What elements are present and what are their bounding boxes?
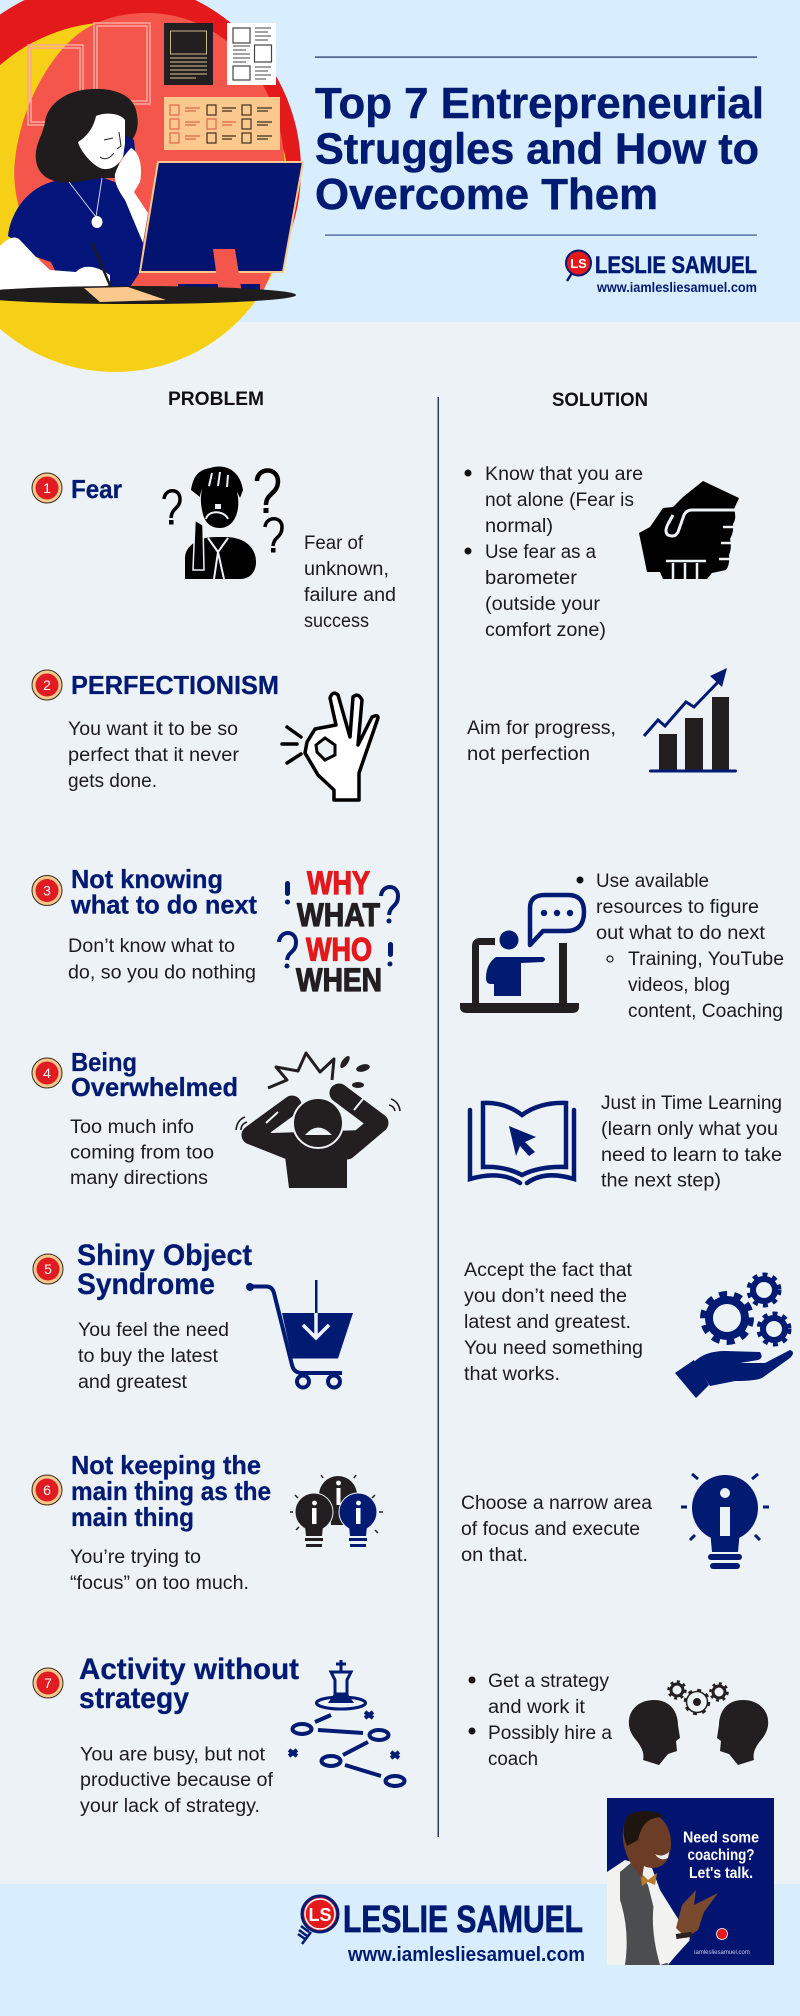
description: Fear of bbox=[304, 533, 364, 554]
problem 4: being overwhelmed bbox=[32, 1047, 400, 1189]
icon: open book with cursor bbox=[470, 1103, 574, 1183]
heading: fear: Fear bbox=[71, 474, 122, 504]
problem 5: shiny object syndrome bbox=[33, 1239, 353, 1393]
footer logo: www.iamlesliesamuel.com bbox=[347, 1944, 585, 1966]
description: You’re trying to bbox=[70, 1547, 201, 1568]
icon: logo magnifier bbox=[298, 1896, 338, 1944]
description: Choose a narrow area bbox=[461, 1493, 652, 1514]
bullet list bbox=[464, 464, 643, 641]
description: not perfection bbox=[467, 744, 590, 765]
icon: confused man bbox=[164, 466, 282, 579]
icon: online teacher bbox=[460, 895, 584, 1013]
photo: man in vest bbox=[607, 1811, 718, 1965]
description bbox=[68, 936, 256, 984]
heading: Shiny Object bbox=[77, 1239, 252, 1272]
icon: logo magnifier: LS bbox=[570, 256, 587, 271]
bullet list: comfort zone) bbox=[485, 620, 606, 641]
icon: gripping fist bbox=[639, 481, 739, 579]
number badge 6 bbox=[32, 1475, 62, 1505]
column heading: solution: SOLUTION bbox=[552, 390, 648, 411]
description bbox=[467, 718, 616, 765]
description: (learn only what you bbox=[601, 1119, 778, 1140]
description bbox=[601, 1093, 782, 1192]
heading: main thing bbox=[71, 1502, 194, 1532]
bullet list: coach bbox=[488, 1749, 538, 1770]
heading bbox=[70, 864, 257, 920]
description: “focus” on too much. bbox=[70, 1573, 249, 1594]
description: failure and bbox=[304, 585, 396, 606]
bullet list: Use fear as a bbox=[485, 542, 596, 563]
description: on that. bbox=[461, 1545, 528, 1566]
description: latest and greatest. bbox=[464, 1312, 631, 1333]
footer logo: LESLIE SAMUEL bbox=[343, 1899, 583, 1941]
number badge 7: 7 bbox=[44, 1675, 52, 1691]
problem 6: not keeping the main thing bbox=[32, 1450, 383, 1594]
description: perfect that it never bbox=[68, 745, 240, 766]
icon: chess strategy bbox=[289, 1660, 404, 1786]
icon: two heads with gears bbox=[629, 1682, 768, 1765]
icon: stressed person bbox=[236, 1053, 400, 1188]
footer band bbox=[0, 1884, 800, 2016]
heading: strategy bbox=[79, 1682, 189, 1715]
description: that works. bbox=[464, 1364, 560, 1385]
icon: why what who when: WHO bbox=[306, 932, 372, 968]
solution 4 bbox=[470, 1093, 782, 1192]
number badge 1 bbox=[32, 473, 62, 503]
heading: Syndrome bbox=[77, 1268, 215, 1301]
small logo bbox=[694, 1928, 750, 1956]
solution 5 bbox=[464, 1260, 793, 1398]
header logo bbox=[566, 250, 757, 295]
description bbox=[304, 533, 396, 632]
heading: Activity without bbox=[79, 1653, 299, 1686]
title: Top 7 Entrepreneurial bbox=[315, 79, 764, 128]
number badge 4: 4 bbox=[43, 1065, 51, 1081]
description bbox=[80, 1744, 274, 1817]
number badge 5: 5 bbox=[44, 1261, 52, 1277]
heading bbox=[77, 1239, 252, 1301]
callout text: Need some bbox=[683, 1830, 759, 1846]
heading bbox=[71, 1450, 271, 1532]
bullet list: Know that you are bbox=[485, 464, 643, 485]
description: You need something bbox=[464, 1338, 643, 1359]
bullet list: videos, blog bbox=[628, 975, 730, 996]
bullet list: content, Coaching bbox=[628, 1001, 783, 1022]
coaching callout card bbox=[607, 1798, 774, 1965]
header band bbox=[0, 0, 800, 322]
solution 1 bbox=[464, 464, 739, 641]
bullet list: out what to do next bbox=[596, 923, 766, 944]
bullet list: Training, YouTube bbox=[628, 949, 784, 970]
icon: why what who when: WHEN bbox=[296, 962, 382, 998]
description bbox=[70, 1117, 214, 1189]
heading: main thing as the bbox=[71, 1476, 271, 1506]
bullet list: and work it bbox=[488, 1697, 586, 1718]
callout text: Let's talk. bbox=[689, 1865, 753, 1882]
description bbox=[461, 1493, 652, 1566]
column heading: problem: PROBLEM bbox=[168, 389, 264, 410]
description: You feel the need bbox=[78, 1320, 229, 1341]
center divider bbox=[438, 397, 439, 1837]
description bbox=[68, 719, 240, 792]
icon: why what who when: WHY bbox=[307, 865, 370, 901]
title bbox=[315, 79, 764, 219]
problem 2: perfectionism bbox=[32, 670, 378, 800]
problem 7: activity without strategy bbox=[33, 1653, 404, 1817]
problem 1: fear bbox=[32, 466, 396, 632]
description: Too much info bbox=[70, 1117, 194, 1138]
icon: hand with gears bbox=[675, 1274, 793, 1398]
description: you don’t need the bbox=[464, 1286, 627, 1307]
icon: why what who when: WHAT bbox=[297, 897, 380, 933]
bullet list: normal) bbox=[485, 516, 553, 537]
description: success bbox=[304, 611, 369, 632]
icon: three light bulbs bbox=[290, 1475, 383, 1547]
description: need to learn to take bbox=[601, 1145, 782, 1166]
bullet list bbox=[468, 1671, 612, 1770]
solution 6 bbox=[461, 1474, 769, 1569]
title: Struggles and How to bbox=[315, 124, 759, 174]
heading: perfectionism: PERFECTIONISM bbox=[71, 670, 279, 700]
description: many directions bbox=[70, 1168, 208, 1189]
icon: logo magnifier: LS bbox=[308, 1905, 332, 1925]
icon: logo magnifier bbox=[566, 250, 591, 281]
icon: ok hand bbox=[282, 693, 378, 800]
title block bbox=[315, 56, 764, 236]
number badge 7 bbox=[33, 1668, 63, 1698]
description: the next step) bbox=[601, 1170, 721, 1192]
description: your lack of strategy. bbox=[80, 1796, 260, 1817]
number badge 2 bbox=[32, 670, 62, 700]
footer logo bbox=[298, 1896, 585, 1966]
heading: Overwhelmed bbox=[71, 1072, 238, 1102]
description: to buy the latest bbox=[78, 1346, 219, 1367]
description: gets done. bbox=[68, 771, 157, 792]
description bbox=[70, 1547, 249, 1594]
header logo: LESLIE SAMUEL bbox=[595, 252, 757, 279]
number badge 1: 1 bbox=[43, 480, 51, 496]
icon: why what who when bbox=[279, 865, 398, 998]
description: productive because of bbox=[80, 1770, 274, 1791]
bullet list: barometer bbox=[485, 568, 578, 589]
bullet list: Possibly hire a bbox=[488, 1723, 612, 1744]
heading: Not knowing bbox=[71, 864, 223, 894]
description: coming from too bbox=[70, 1142, 214, 1164]
heading bbox=[71, 1047, 238, 1102]
description: You want it to be so bbox=[68, 719, 238, 740]
description: Accept the fact that bbox=[464, 1260, 633, 1281]
solution 7 bbox=[468, 1671, 768, 1770]
description: Just in Time Learning bbox=[601, 1093, 782, 1114]
number badge 3 bbox=[32, 876, 62, 906]
number badge 5 bbox=[33, 1254, 63, 1284]
icon: info light bulb bbox=[681, 1474, 769, 1569]
heading: Being bbox=[71, 1047, 137, 1077]
description bbox=[464, 1260, 643, 1385]
description bbox=[78, 1320, 229, 1393]
heading: Not keeping the bbox=[71, 1450, 261, 1480]
number badge 6: 6 bbox=[43, 1482, 51, 1498]
bullet list: Get a strategy bbox=[488, 1671, 609, 1692]
callout text bbox=[683, 1830, 759, 1882]
icon: shopping cart bbox=[246, 1280, 353, 1388]
bullet list: not alone (Fear is bbox=[485, 490, 634, 511]
solution 2 bbox=[467, 668, 737, 772]
title: Overcome Them bbox=[315, 170, 658, 219]
number badge 2: 2 bbox=[43, 677, 51, 693]
illustration: woman at desk bbox=[0, 0, 303, 372]
description: and greatest bbox=[78, 1372, 188, 1393]
callout text: coaching? bbox=[688, 1847, 754, 1864]
heading bbox=[79, 1653, 299, 1715]
heading: what to do next bbox=[70, 890, 257, 920]
header logo: www.iamlesliesamuel.com bbox=[596, 279, 757, 295]
bar chart icon bbox=[644, 668, 737, 772]
small logo: iamlesliesamuel.com bbox=[694, 1950, 750, 1956]
bullet list bbox=[576, 871, 784, 1022]
bullet list: Use available bbox=[596, 871, 709, 892]
solution 3 bbox=[460, 871, 784, 1022]
bullet list: (outside your bbox=[485, 594, 601, 615]
bullet list: resources to figure bbox=[596, 897, 759, 918]
description: do, so you do nothing bbox=[68, 962, 256, 984]
number badge 4 bbox=[32, 1058, 62, 1088]
description: You are busy, but not bbox=[80, 1744, 266, 1766]
description: unknown, bbox=[304, 559, 389, 580]
description: of focus and execute bbox=[461, 1519, 640, 1540]
description: Don’t know what to bbox=[68, 936, 235, 957]
problem 3: not knowing what to do next bbox=[32, 864, 398, 998]
number badge 3: 3 bbox=[43, 882, 51, 898]
description: Aim for progress, bbox=[467, 718, 616, 739]
